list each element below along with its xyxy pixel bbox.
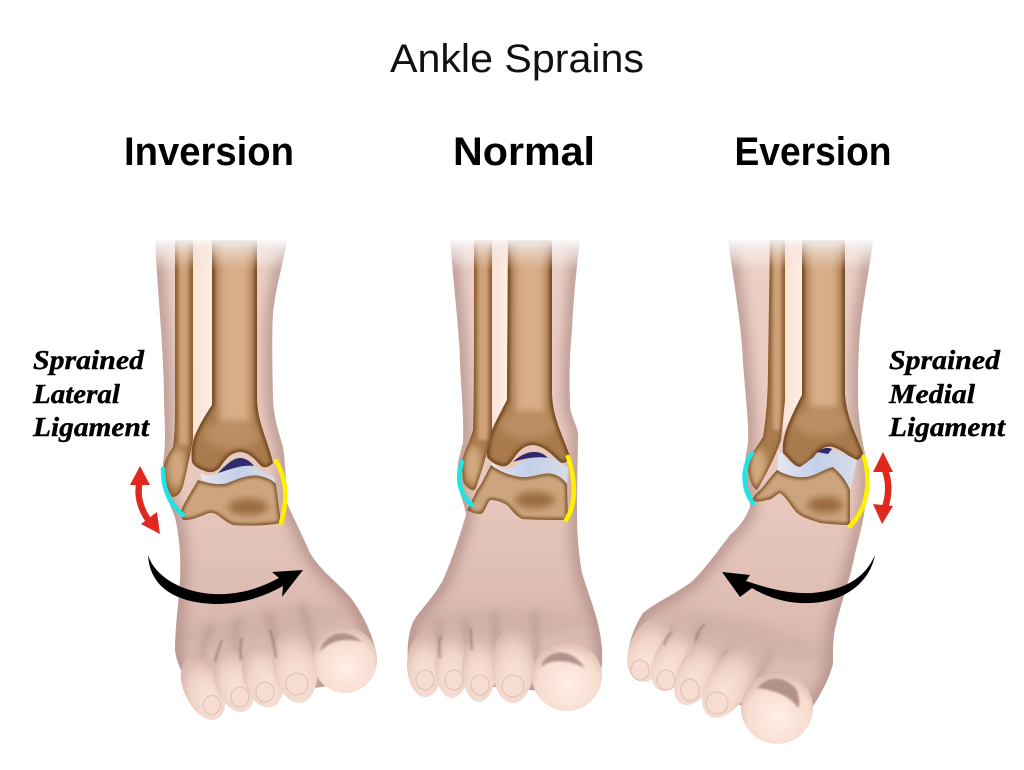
ligament: cyan [163, 469, 183, 515]
ligament: yellow [566, 457, 574, 520]
illustration: everted ankle [619, 235, 893, 744]
label: sprained lateral ligament: Sprained [33, 345, 145, 375]
cartilage [200, 463, 276, 488]
fibula/tibia gap [492, 240, 508, 427]
fibula/tibia gap [193, 240, 212, 437]
label: sprained medial ligament: Ligament [888, 412, 1007, 442]
talus [181, 475, 281, 526]
ligament: yellow [276, 461, 285, 523]
label: sprained lateral ligament: Ligament [32, 412, 151, 442]
arrow: black curved [148, 555, 303, 604]
illustration: normal ankle [407, 235, 602, 711]
arrow: red double [873, 452, 893, 524]
bones [748, 235, 863, 490]
bones [462, 235, 570, 490]
bones [163, 235, 273, 497]
label: sprained lateral ligament: Lateral [32, 379, 121, 409]
ligament: cyan [459, 462, 472, 505]
fibula/tibia gap [783, 240, 802, 433]
heading: Normal: Normal [453, 130, 595, 174]
toes [172, 605, 377, 727]
foot skin [408, 240, 602, 695]
label: sprained medial ligament [888, 345, 1007, 442]
talus [467, 465, 568, 520]
cartilage [491, 457, 568, 484]
toes [619, 612, 813, 744]
toes [407, 612, 602, 711]
heading: Inversion: Inversion [124, 130, 294, 174]
foot skin [628, 240, 873, 725]
cartilage [777, 450, 857, 490]
talus [752, 467, 850, 525]
label: sprained medial ligament: Medial [888, 379, 976, 409]
label: sprained medial ligament: Sprained [889, 345, 1001, 375]
illustration: inverted ankle [130, 235, 377, 727]
ligament: yellow [850, 457, 868, 526]
title: Ankle Sprains [390, 37, 644, 81]
arrow: black curved [722, 555, 875, 603]
label: sprained lateral ligament [32, 345, 151, 442]
foot skin [155, 240, 377, 700]
ligament: cyan [745, 453, 753, 503]
arrow: red double [130, 466, 160, 534]
heading: Eversion: Eversion [734, 130, 892, 174]
